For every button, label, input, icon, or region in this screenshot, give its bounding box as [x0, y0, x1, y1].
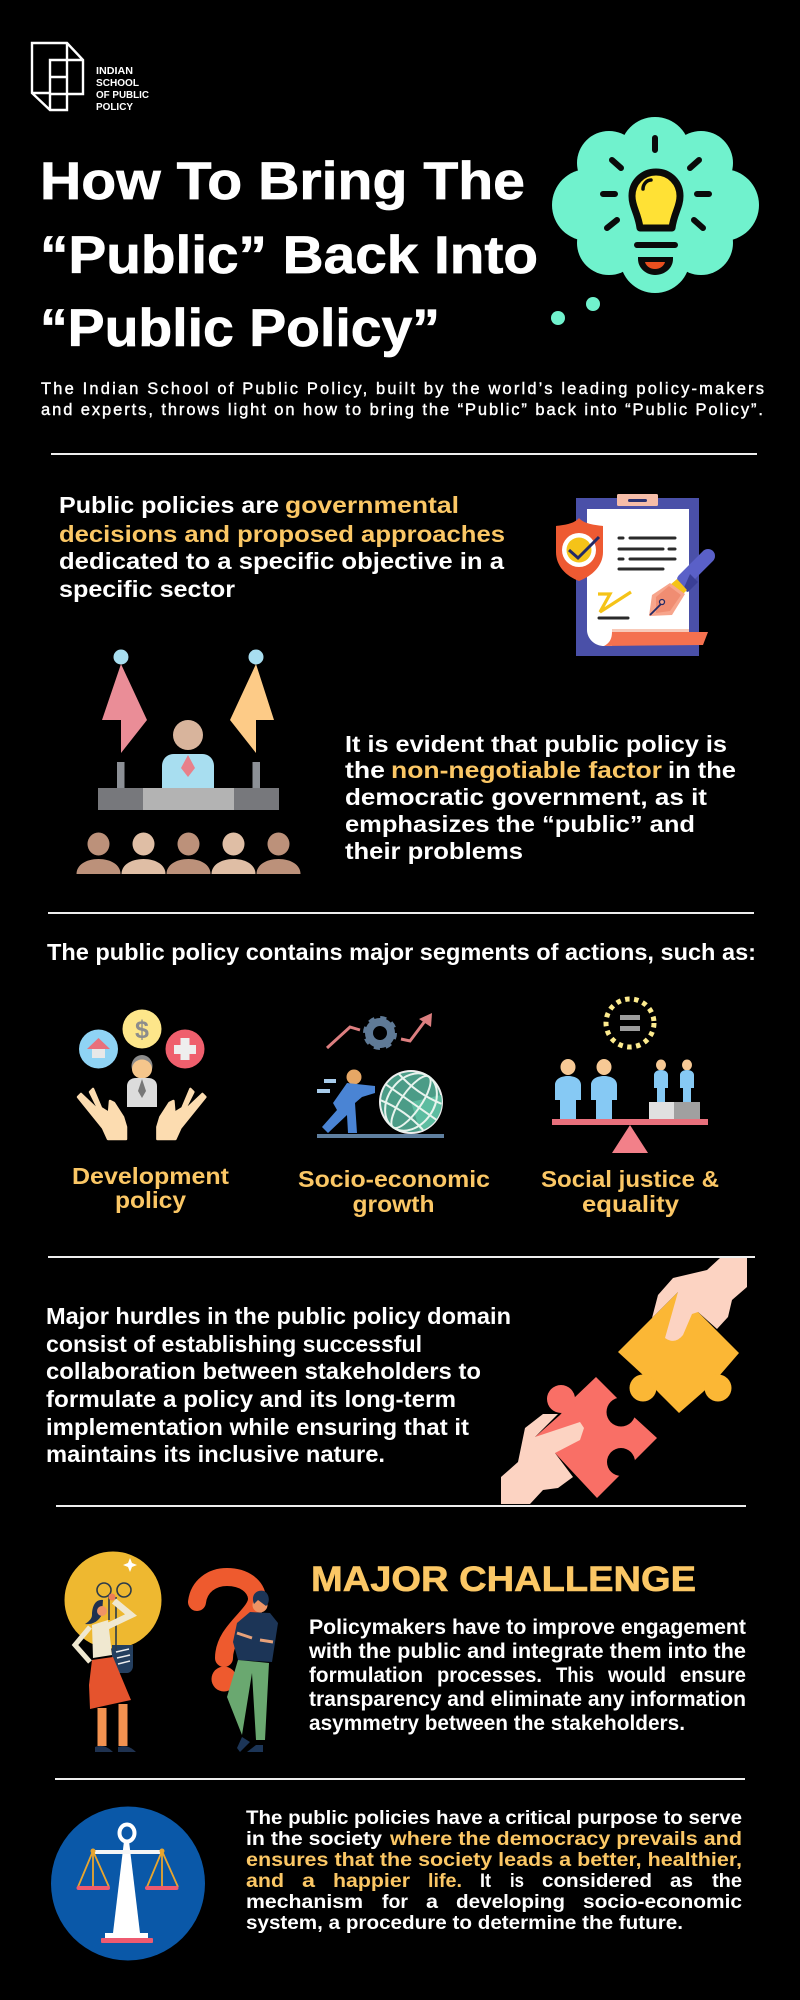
text block: major hurdles: Major hurdles in the public policy domain	[46, 1303, 511, 1329]
text block: definition of public policies: specific sector	[59, 576, 235, 602]
icon: social justice and equality scale	[552, 999, 708, 1153]
logo: Indian School of Public Policy: SCHOOL	[96, 78, 139, 89]
text block: definition of public policies: Public policies are	[59, 492, 279, 518]
logo: Indian School of Public Policy: OF PUBLIC	[96, 90, 149, 101]
text block: major hurdles	[46, 1303, 511, 1467]
text block: critical purpose: system, a procedure to determine the future.	[246, 1912, 683, 1934]
text block: critical purpose: where the democracy prevails and	[389, 1828, 742, 1850]
text block: critical purpose: ensures that the society leads a better, healthier,	[246, 1849, 742, 1871]
intro text: and experts, throws light on how to bring the “Public” back into “Public Policy”.	[41, 401, 763, 419]
text block: critical purpose: the	[712, 1870, 742, 1892]
text block: critical purpose: It	[480, 1870, 491, 1892]
text block: major hurdles: collaboration between stakeholders to	[46, 1358, 481, 1384]
title: “Public Policy”	[40, 299, 440, 358]
text block: critical purpose: life.	[428, 1870, 462, 1892]
heading: segments of actions: The public policy contains major segments of actions, such as:	[47, 939, 756, 965]
title	[40, 152, 538, 358]
text block: major challenge description: formulation	[309, 1664, 423, 1687]
text block: definition of public policies	[59, 492, 505, 602]
text block: non-negotiable factor: It is evident that public policy is	[345, 731, 727, 757]
text block: major challenge description: transparency and eliminate any information	[309, 1688, 746, 1711]
text block: critical purpose: is	[510, 1870, 524, 1892]
icon: man with question mark	[197, 1577, 278, 1752]
text block: major hurdles: implementation while ensuring that it	[46, 1414, 469, 1440]
icon: clipboard with shield and pen	[556, 494, 708, 656]
text block: definition of public policies: decisions and proposed approaches	[59, 521, 505, 547]
text block: major hurdles: consist of establishing successful	[46, 1331, 422, 1357]
text block: critical purpose	[246, 1807, 742, 1934]
icon: speaker at podium with audience	[76, 650, 300, 874]
text block: non-negotiable factor: their problems	[345, 838, 523, 864]
text block: non-negotiable factor: in the	[668, 757, 736, 783]
text block: non-negotiable factor: non-negotiable factor	[391, 757, 662, 783]
icon: light bulb thought cloud	[551, 117, 759, 325]
label: development policy	[72, 1163, 229, 1213]
text block: critical purpose: for	[382, 1891, 408, 1913]
intro text	[41, 380, 764, 419]
text block: major challenge description	[308, 1616, 746, 1735]
text block: major challenge description: with the public and integrate them into the	[308, 1640, 746, 1663]
label: social justice and equality	[541, 1166, 719, 1217]
text block: non-negotiable factor: the	[345, 757, 385, 783]
text block: definition of public policies: dedicated to a specific objective in a	[59, 548, 505, 574]
title: How To Bring The	[40, 152, 525, 211]
icon: development policy: $	[135, 1016, 149, 1044]
text block: non-negotiable factor	[345, 731, 736, 864]
icon: scales of justice in blue circle	[51, 1806, 205, 1960]
logo: Indian School of Public Policy: POLICY	[96, 102, 133, 113]
heading: major challenge: MAJOR CHALLENGE	[311, 1560, 696, 1599]
text block: critical purpose: The public policies have a critical purpose to serve	[246, 1807, 742, 1829]
text block: critical purpose: happier	[333, 1870, 410, 1892]
icon: hands joining puzzle pieces	[501, 1258, 747, 1504]
text block: major challenge description: would	[607, 1664, 666, 1687]
text block: major challenge description: asymmetry between the stakeholders.	[309, 1712, 685, 1735]
text block: critical purpose: in the society	[246, 1828, 382, 1850]
intro text: The Indian School of Public Policy, built by the world’s leading policy-makers	[41, 380, 764, 398]
label: social justice and equality: Social justice &	[541, 1166, 719, 1192]
logo: Indian School of Public Policy	[32, 43, 149, 113]
text block: critical purpose: a	[302, 1870, 315, 1892]
icon: development policy	[78, 1010, 205, 1139]
icon: socio-economic growth	[317, 1013, 454, 1145]
text block: non-negotiable factor: emphasizes the “public” and	[345, 811, 695, 837]
text block: major challenge description: This	[556, 1664, 594, 1687]
text block: critical purpose: mechanism	[246, 1891, 363, 1913]
label: socio-economic growth: Socio-economic	[298, 1166, 490, 1192]
text block: non-negotiable factor: democratic government, as it	[345, 784, 707, 810]
text block: major hurdles: maintains its inclusive nature.	[46, 1441, 385, 1467]
label: socio-economic growth	[298, 1166, 490, 1217]
text block: critical purpose: and	[246, 1870, 284, 1892]
text block: definition of public policies: governmental	[285, 492, 459, 518]
icon: woman with light bulb	[64, 1552, 162, 1752]
logo: Indian School of Public Policy: INDIAN	[96, 66, 133, 77]
text block: major challenge description: ensure	[680, 1664, 746, 1687]
label: development policy: policy	[115, 1187, 186, 1213]
text block: critical purpose: as	[670, 1870, 693, 1892]
text block: critical purpose: considered	[542, 1870, 652, 1892]
title: “Public” Back Into	[40, 226, 538, 285]
text block: critical purpose: a	[426, 1891, 438, 1913]
label: socio-economic growth: growth	[352, 1191, 434, 1217]
label: development policy: Development	[72, 1163, 229, 1189]
label: social justice and equality: equality	[582, 1191, 679, 1217]
text block: major hurdles: formulate a policy and its long-term	[46, 1386, 456, 1412]
text block: critical purpose: socio-economic	[583, 1891, 742, 1913]
text block: major challenge description: processes.	[437, 1664, 542, 1687]
text block: critical purpose: developing	[456, 1891, 565, 1913]
text block: major challenge description: Policymakers have to improve engagement	[309, 1616, 746, 1639]
